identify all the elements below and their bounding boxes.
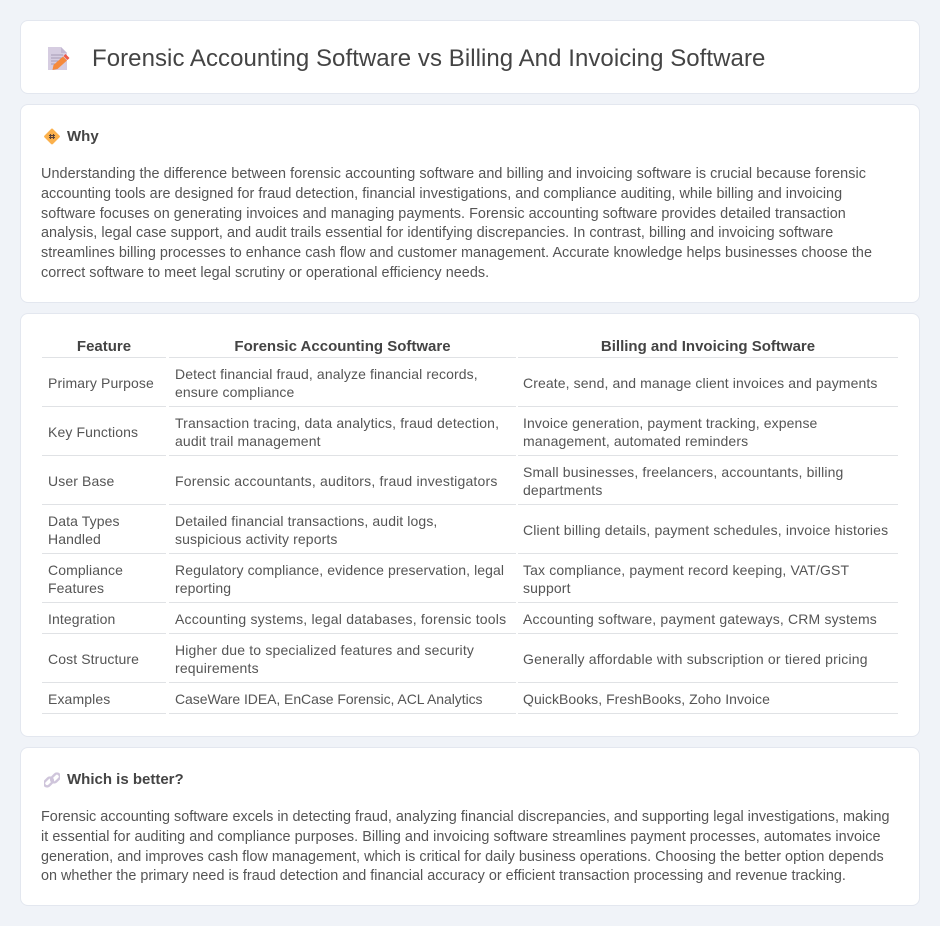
row: examples: CaseWare IDEA, EnCase Forensic, ACL Analytics	[175, 691, 482, 707]
panel: title	[20, 20, 920, 94]
row: data types handled: Detailed financial transactions, audit logs,	[175, 513, 437, 529]
row: compliance features: reporting	[175, 580, 231, 596]
panel: which is better	[20, 747, 920, 906]
heading: which is better: Which is better?	[67, 771, 184, 788]
icon: warning diamond	[44, 128, 60, 144]
row: data types handled: Handled	[48, 531, 101, 547]
row: key functions: Key Functions	[48, 424, 138, 440]
row: examples: QuickBooks, FreshBooks, Zoho Invoice	[523, 691, 770, 707]
row: primary purpose	[48, 366, 877, 400]
row: compliance features	[48, 562, 849, 596]
row: user base: Forensic accountants, auditors, fraud investigators	[175, 473, 498, 489]
text: why paragraph: software focuses on generating invoices and managing payments. Forensic accounting software provides detailed transaction	[41, 206, 846, 222]
row: cost structure: Higher due to specialized features and security	[175, 642, 474, 658]
panel: why	[20, 104, 920, 303]
icon: chain link	[44, 772, 60, 788]
row: key functions: Transaction tracing, data analytics, fraud detection,	[175, 415, 499, 431]
row: data types handled: Client billing details, payment schedules, invoice histories	[523, 522, 888, 538]
row: data types handled: Data Types	[48, 513, 120, 529]
row: key functions: audit trail management	[175, 433, 321, 449]
row: key functions: Invoice generation, payment tracking, expense	[523, 415, 817, 431]
heading: why: Why	[67, 128, 99, 145]
row: data types handled: suspicious activity reports	[175, 531, 337, 547]
row: data types handled	[48, 513, 888, 547]
row: compliance features: Regulatory compliance, evidence preservation, legal	[175, 562, 504, 578]
table header	[77, 338, 815, 355]
row: integration: Accounting software, payment gateways, CRM systems	[523, 611, 877, 627]
row: compliance features: Features	[48, 580, 104, 596]
row: compliance features: Compliance	[48, 562, 123, 578]
row: primary purpose: ensure compliance	[175, 384, 294, 400]
text: why paragraph: Understanding the difference between forensic accounting software and billing and invoicing software is crucial because forensic	[41, 166, 866, 182]
row: compliance features: support	[523, 580, 571, 596]
row: cost structure: requirements	[175, 660, 259, 676]
row: integration	[48, 611, 877, 627]
text: why paragraph: streamlines billing processes to enhance cash flow and customer management. Accurate knowledge helps businesses choose the	[41, 245, 872, 261]
row: integration: Accounting systems, legal databases, forensic tools	[175, 611, 506, 627]
row: key functions	[48, 415, 817, 449]
row: cost structure: Cost Structure	[48, 651, 139, 667]
text: which is better paragraph: on whether the primary need is fraud detection and financial accuracy or efficient transaction processing and revenue tracking.	[41, 868, 846, 884]
row: user base: User Base	[48, 473, 114, 489]
row: examples: Examples	[48, 691, 110, 707]
table header: Forensic Accounting Software	[234, 338, 451, 355]
text: why paragraph: correct software to meet legal scrutiny or operational efficiency needs.	[41, 265, 489, 281]
row: cost structure	[48, 642, 868, 676]
text: why paragraph	[41, 166, 872, 281]
row: primary purpose: Detect financial fraud, analyze financial records,	[175, 366, 478, 382]
row: primary purpose: Primary Purpose	[48, 375, 154, 391]
text: why paragraph: accounting tools are designed for fraud detection, financial investigations, and compliance auditing, while billing and invoicing	[41, 186, 842, 202]
text: which is better paragraph: generation, and improves cash flow management, which is critical for daily business operations. Choosing the better option depends	[41, 849, 884, 865]
text: which is better paragraph	[41, 809, 889, 884]
table header: Feature	[77, 338, 131, 355]
heading: page title: Forensic Accounting Software vs Billing And Invoicing Software	[92, 45, 765, 72]
row: examples	[48, 691, 770, 707]
row: integration: Integration	[48, 611, 115, 627]
table header: Billing and Invoicing Software	[601, 338, 815, 355]
row: cost structure: Generally affordable with subscription or tiered pricing	[523, 651, 868, 667]
row: compliance features: Tax compliance, payment record keeping, VAT/GST	[523, 562, 849, 578]
row: user base	[48, 464, 843, 498]
icon: document with pencil	[48, 47, 70, 70]
panel: comparison table	[20, 313, 920, 737]
row: user base: departments	[523, 482, 602, 498]
text: which is better paragraph: Forensic accounting software excels in detecting fraud, analyzing financial discrepancies, and supporting legal investigations, making	[41, 809, 889, 825]
row: key functions: management, automated reminders	[523, 433, 748, 449]
text: why paragraph: analysis, legal case support, and audit trails essential for identifying discrepancies. In contrast, billing and invoicing software	[41, 225, 833, 241]
text: which is better paragraph: it essential for auditing and compliance purposes. Billing and invoicing software streamlines payment processes, automates invoice	[41, 829, 880, 845]
row: user base: Small businesses, freelancers, accountants, billing	[523, 464, 843, 480]
row: primary purpose: Create, send, and manage client invoices and payments	[523, 375, 877, 391]
